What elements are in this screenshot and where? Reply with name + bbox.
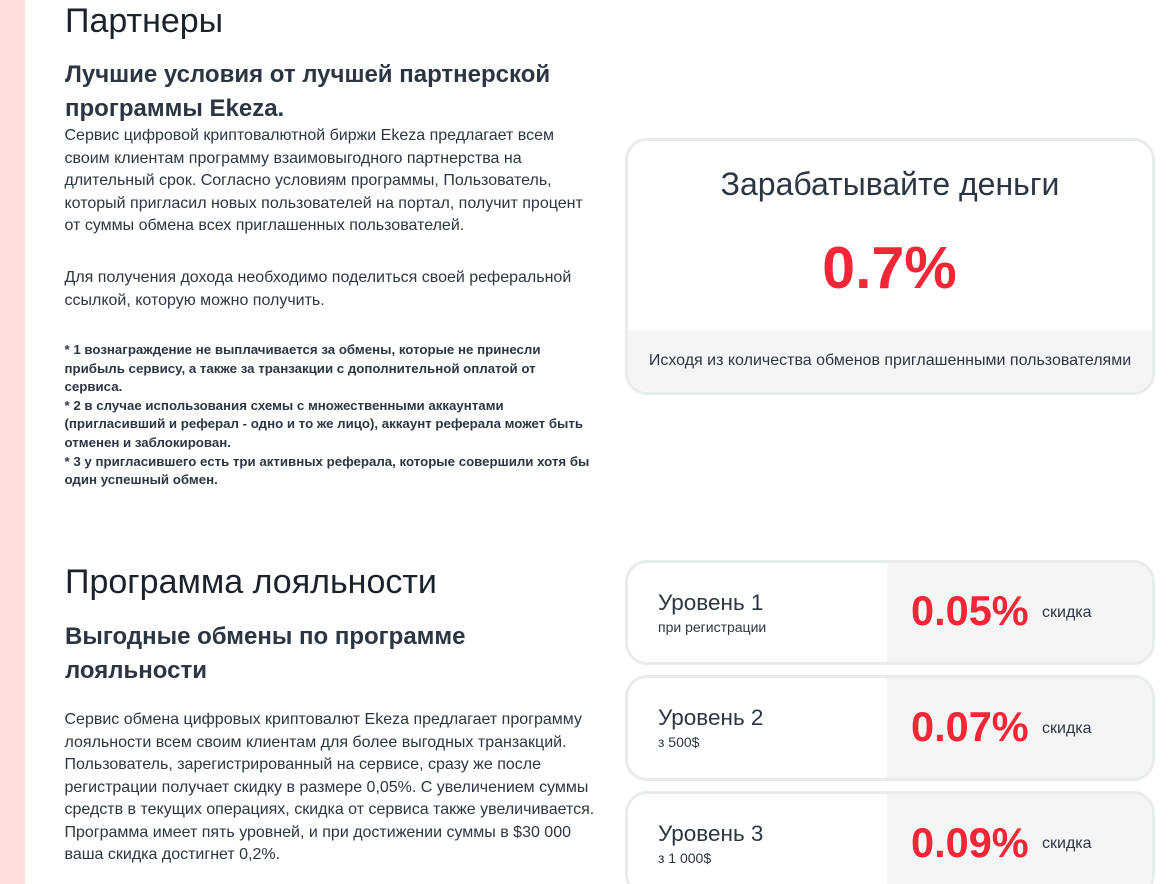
discount value: 0.05% [911, 587, 1029, 634]
heading: Программа лояльности: Программа лояльности [65, 563, 437, 601]
text block: footnotes: отменен и заблокирован. [64, 435, 231, 450]
text block: footnotes: прибыль сервису, а также за транзакции с дополнительной оплатой от [64, 361, 536, 376]
subheading: loyalty programme: Выгодные обмены по программе [65, 623, 466, 650]
text block: loyalty programme description: Программа имеет пять уровней, и при достижении суммы в $30 000 [64, 824, 571, 840]
level condition: з 1 000$ [658, 850, 711, 866]
panel: level 3 card [625, 791, 1155, 884]
text block: loyalty programme description: регистрации получает скидку в размере 0,05%. С увеличением суммы [64, 778, 588, 796]
text block: footnotes [64, 342, 589, 487]
discount value: 0.09% [911, 819, 1029, 866]
subheading: partner programme: Лучшие условия от лучшей партнерской [65, 61, 550, 88]
text block: footnotes: * 3 у пригласившего есть три активных реферала, которые совершили хотя бы [64, 454, 589, 469]
subheading: loyalty programme: лояльности [65, 657, 207, 684]
card title: Зарабатывайте деньги [721, 166, 1059, 202]
text block: loyalty programme description [64, 711, 594, 863]
decorative sidebar strip [0, 0, 25, 884]
text block: partner programme description: длительный срок. Согласно условиям программы, Пользователь, [64, 172, 552, 189]
subheading: partner programme: программы Ekeza. [65, 95, 284, 122]
level name: Уровень 1 [658, 590, 763, 615]
discount label: скидка [1042, 720, 1092, 737]
text block: partner programme description: который пригласил новых пользователей на портал, получит процент [64, 194, 583, 212]
text block: how to earn [64, 269, 571, 308]
text block: footnotes: один успешный обмен. [64, 472, 218, 487]
text block: loyalty programme description: Пользователь, зарегистрированный на сервисе, сразу же после [64, 756, 541, 773]
text block: footnotes: (пригласивший и реферал - одно и то же лицо), аккаунт реферала может быть [64, 416, 583, 431]
subheading: loyalty programme [65, 623, 466, 684]
level condition: з 500$ [658, 734, 699, 750]
text block: footnotes: * 1 вознаграждение не выплачивается за обмены, которые не принесли [64, 342, 541, 357]
text block: loyalty programme description: ваша скидка достигнет 0,2%. [64, 846, 280, 863]
discount value: 0.07% [911, 703, 1029, 750]
discount label: скидка [1042, 604, 1092, 621]
text block: loyalty programme description: лояльности всем своим клиентам для более выгодных транзакций. [64, 734, 567, 750]
text block: footnotes: * 2 в случае использования схемы с множественными аккаунтами [64, 398, 504, 413]
card footer note [628, 330, 1152, 395]
text block: partner programme description [64, 127, 583, 234]
text block: partner programme description: от суммы обмена всех приглашенных пользователей. [64, 217, 464, 234]
panel: level 2 card [625, 675, 1155, 781]
text block: partner programme description: своим клиентам программу взаимовыгодного партнерства на [64, 150, 522, 166]
panel: level 1 card [625, 560, 1155, 665]
card footer note: Исходя из количества обменов приглашенными пользователями [649, 352, 1131, 369]
big percentage: 0.7% [822, 235, 957, 301]
heading: Партнеры: Партнеры [65, 2, 223, 40]
subheading: partner programme [65, 61, 550, 122]
text block: partner programme description: Сервис цифровой криптовалютной биржи Ekeza предлагает всем [64, 127, 554, 144]
text block: how to earn: ссылкой, которую можно получить. [64, 292, 325, 308]
level name: Уровень 2 [658, 705, 763, 730]
text block: loyalty programme description: средств в текущих операциях, скидка от сервиса также увеличивается. [64, 801, 594, 818]
level name: Уровень 3 [658, 821, 763, 846]
text block: footnotes: сервиса. [64, 379, 122, 394]
text block: loyalty programme description: Сервис обмена цифровых криптовалют Ekeza предлагает программу [64, 711, 582, 728]
panel: earn money card [625, 138, 1155, 395]
level condition: при регистрации [658, 619, 766, 635]
discount label: скидка [1042, 835, 1092, 852]
text block: how to earn: Для получения дохода необходимо поделиться своей реферальной [64, 269, 571, 286]
